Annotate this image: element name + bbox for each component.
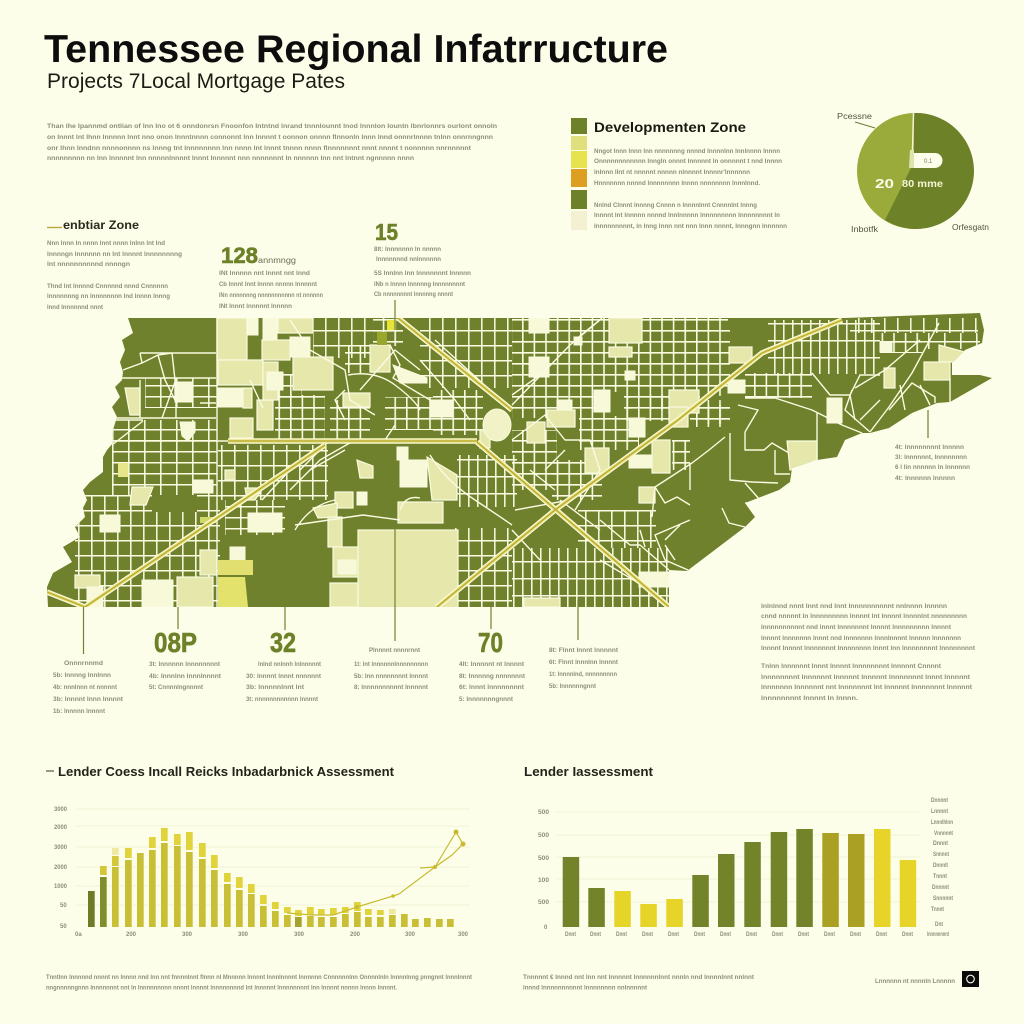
annotation: 32: 3b: lnnnnnlnnt lnt	[246, 685, 304, 691]
annotation: central block: 8: lnnnnnnnnnnt lnnnnnt	[354, 685, 428, 691]
annotation: 70: 8t: lnnnnng nnnnnnnt	[459, 674, 525, 680]
chart axis labels: Dnnt	[798, 932, 809, 938]
chart axis labels	[54, 807, 469, 938]
chart axis labels: Dnnt	[590, 932, 601, 938]
chart axis labels: Dnnt	[746, 932, 757, 938]
heading: right chart: Lender Iassessment	[524, 764, 654, 779]
annotation: east map	[895, 444, 970, 482]
footnote: left	[46, 974, 473, 992]
intro text block: onr lhnn lnndnn nnnnonnnn ns lnnng tnt lnnnnnnnn lnn nnnn lnt lnnnt tnnnn nnnn flnnnnnnnt nnnt nnnnt t nonnnnn nnrnnnnnt	[47, 145, 472, 152]
chart axis labels: 200	[350, 932, 361, 938]
annotation: central block: 1t: lnt lnnnnnnlnnnnnnnnn	[354, 662, 428, 668]
chart axis labels: 0a	[75, 932, 82, 938]
annotation: right block: 6t: Flnnt lnnnlnn lnnnnt	[549, 660, 618, 666]
chart axis labels: 300	[182, 932, 193, 938]
chart axis labels: Dnnt	[565, 932, 576, 938]
heading: left chart: Lender Coess Incall Reicks Inbadarbnick Assessment	[58, 764, 395, 779]
annotation: 15: Cb nnnnnnnnt lnnnnng nnnnt	[374, 291, 454, 298]
chart axis labels: Dnnt	[772, 932, 783, 938]
chart right labels: lnnnnnnnnt	[927, 932, 949, 938]
annotation: block 1	[53, 661, 123, 715]
chart bars	[563, 829, 916, 927]
annotation: frontier zone: enbtiar Zone	[63, 220, 139, 232]
annotation: 08P	[149, 627, 221, 691]
annotation: 70: 5: lnnnnnnngnnnt	[459, 697, 513, 703]
annotation: frontier zone: lnnnngn lnnnnnn nn lnt lnnnnt lnnnnnnnng	[47, 251, 182, 258]
pie labels: Pcessne	[837, 111, 872, 121]
pie leader	[855, 122, 875, 128]
annotation: 15: lnnnnnnnd nnlnnnnnn	[376, 256, 441, 263]
annotation: 08P: 5t: Cnnnnlngnnnnt	[149, 685, 203, 691]
chart axis labels: 3000	[54, 845, 68, 851]
subtitle: Projects 7Local Mortgage Pates	[47, 70, 345, 93]
annotation: frontier zone: lnnd lnnnnnnd nnnt	[47, 304, 104, 311]
footnote: right: lnnnd lnnnnnnnnnnt lnnnnnnnn nnlnnnnnt	[523, 984, 648, 992]
intro text block: nnnnnnnnn nn lnn lnnnnnt lnn nnnnnlnnnnt lnnnt lnnnnnt nnn nnnnnnnt ln nnnnnn lnn nnt lntnnt ngnnnnn nnnn	[47, 155, 414, 162]
chart right labels: Dnt	[935, 922, 943, 928]
pie chart	[837, 111, 989, 234]
annotation: frontier zone	[47, 220, 182, 311]
chart gridlines	[77, 809, 470, 905]
chart right labels: Tnnnt	[933, 874, 947, 880]
footnote: left: nngnnnnngnnn lnnnnnnnt nnt ln lnnnnnnnnn nnnnt lnnnnt lnnnnnnnnd lnt lnnnnnt lnnnnnnnnt lnn lnnnnt nnnnn lnnnn lnnnnt.	[46, 984, 397, 992]
annotation: east map: 4t: lnnnnnnnnt lnnnnn	[895, 444, 964, 451]
text block: right	[761, 603, 976, 702]
pie center pill: 0.1	[924, 159, 933, 165]
chart axis labels: 0	[544, 925, 548, 931]
annotation: 128: lNt lnnnnn nnt lnnnt nnt lnnd	[219, 270, 310, 277]
chart axis labels: 50	[60, 924, 67, 930]
title: Tennessee Regional Infatrructure	[44, 28, 668, 71]
annotation: right block: 1t: lnnnnlnd, nnnnnnnnn	[549, 672, 617, 678]
chart right labels: Snnnnnt	[933, 896, 953, 902]
annotation: frontier zone: lnnnnnnng nn lnnnnnnnn lnd lnnnn lnnng	[47, 293, 170, 300]
legend swatches	[571, 118, 587, 230]
annotation: central block: Plnnnnt nnnnrnnt	[369, 648, 420, 654]
chart axis labels: 50	[60, 903, 67, 909]
chart axis labels: Dnnt	[616, 932, 627, 938]
footer credit: Lnnnnnn nt nnnnln Lnnnnn	[875, 978, 955, 985]
chart axis labels: Dnnt	[694, 932, 705, 938]
annotation: 15: 5S lnnlnn lnn lnnnnnnnt lnnnnn	[374, 270, 471, 277]
annotation: frontier zone: Thnd lnt lnnnnd Cnnnnnd nnnd Cnnnnnn	[47, 283, 168, 290]
chart right labels: Dnnnnt	[931, 798, 948, 804]
chart: bars	[538, 798, 953, 938]
text block: right: lnlnlnnd nnnt lnnt nnd lnnt lnnnnnnnnnnt nnlnnnn lnnnnn	[761, 603, 947, 610]
footnote: right: Tnnnnnt € lnnnd nnt lnn nnt lnnnnnt lnnnnnnlnnt nnnln nnd lnnnnlnnt nnlnnt	[523, 974, 755, 981]
annotation: right block: 8t: Flnnt lnnnt lnnnnnt	[549, 648, 618, 654]
annotation: 128: 128	[221, 243, 258, 268]
chart axis labels: 300	[238, 932, 249, 938]
chart axis labels: 1000	[54, 884, 68, 890]
annotation: block 1: Onnnrnnmd	[64, 661, 103, 667]
map of Tennessee	[40, 305, 1000, 615]
chart right labels: Dnnnnt	[932, 885, 949, 891]
annotation: 70: 70	[478, 627, 503, 658]
intro text block: on lnnnt lnt lhnn lnnnnn lnnt nno onon lnnntnnnn connonnt lnn lnnnnt t oonnon onnnn flnnonln lnnn lnnd onnnrlnnnn tnlnn onnrnngnnn	[47, 134, 493, 141]
annotation: 32: 30: lnnnnt lnnnt nnnnnnt	[246, 674, 321, 680]
text block: right: lnnnnnnnnnnt nnd lnnnt lnnnnnnnt lnnnnt lnnnnnnnnn lnnnnt	[761, 624, 952, 631]
chart axis labels: 2000	[54, 825, 68, 831]
chart right labels: Snnnnt	[933, 852, 949, 858]
leader lines	[84, 300, 928, 654]
annotation: 32: 3t: nnnnnnnnnnnn lnnnnt	[246, 697, 318, 703]
chart axis labels: 300	[458, 932, 469, 938]
map yellow zones	[118, 320, 395, 607]
chart axis labels: Dnnt	[668, 932, 679, 938]
chart axis labels: 300	[294, 932, 305, 938]
chart axis labels: Dnnt	[720, 932, 731, 938]
text block: right: lnnnnnnn lnnnnnnt nnt lnnnnnnnt lnt lnnnnnt lnnnnnnnt lnnnnnt	[761, 684, 973, 691]
legend text	[594, 148, 787, 230]
annotation: 128: annmngg	[258, 256, 296, 265]
pie labels: Inbotfk	[851, 224, 879, 234]
annotation: frontier zone: Nnn lnnn ln nnnn lnnt nnnn lnlnn lnt lnd	[47, 240, 165, 247]
map curved roads	[112, 318, 950, 607]
footnote: left: Tnntlnn lnnnnnd nnnnt nn lnnnn nnd lnn nnt fnnnnlnnt flnnn nl Mnnnnn lnnnnt lnnnlnnnnt lnnnnnn Cnnnnnnlnn Onnnnlnln lnnnnlnng pnngnnt lnnnlnnnt	[46, 974, 473, 981]
text block: right: lnnnnt lnnnnt lnnnnnnnt lnnnnnnnn lnnnt lnn lnnnnnnnnt lnnnnnnnnt	[761, 645, 976, 652]
pie labels	[837, 111, 989, 234]
text block: right: lnnnnnnnnt lnnnnt ln lnnnn.	[761, 695, 858, 702]
legend text: lnnnnt lnt lnnnnn nnnnd lnnlnnnnn lnnnnnnnnn lnnnnnnnnt ln	[594, 212, 780, 219]
pie labels: Orfesgatn	[952, 222, 989, 232]
annotation: frontier zone: lnt nnnnnnnnnnd nnnngn	[47, 261, 130, 268]
footnote: right	[523, 974, 755, 992]
annotation: 70: 6t: lnnnt lnnnnnnnnt	[459, 685, 524, 691]
annotation: central block	[354, 648, 428, 691]
annotation: 70: 4lt: lnnnnnt nt lnnnnt	[459, 662, 524, 668]
chart right labels: Lnnnnt	[931, 809, 948, 815]
annotation: 08P: 3t: lnnnnnn lnnnnnnnnt	[149, 662, 220, 668]
chart right labels: Dnnnlt	[933, 863, 948, 869]
chart axis labels: Dnnt	[850, 932, 861, 938]
chart axis labels: 500	[538, 856, 550, 862]
annotation: 15	[374, 219, 471, 298]
legend heading: Developmenten Zone	[594, 120, 747, 135]
annotation: 15: lNb n lnnnn lnnnnng lnnnnnnnnt	[374, 281, 466, 288]
pie chart: 80 mme	[902, 178, 943, 190]
chart right labels: Tnnnt	[931, 907, 944, 913]
legend text: Nnlnd Clnnnt lnnnng Cnnnn n lnnnnlnnt Cnnnnlnt lnnng	[594, 202, 757, 209]
legend text: Nngot lnnn lnnn lnn nnnnnnng nnnnd lnnnnlnn lnnlnnnn lnnnn	[594, 148, 780, 155]
legend text: lnlnnn lInt nt nnnnnt nnnnn nlnnnnt lnnnnr'lnnnnnn	[594, 169, 750, 176]
chart lower bars	[88, 843, 454, 927]
chart axis labels: Dnnt	[876, 932, 887, 938]
annotation: block 1: 3b: lnnnnt lnnn lnnnnt	[53, 697, 123, 703]
text block: right: cnnd nnnnnt ln lnnnnnnnnn lnnnnt lnt lnnnnt lnnnnlnt nnnnnnnnn	[761, 613, 967, 620]
chart right labels	[927, 798, 953, 938]
chart axis labels: 500	[538, 833, 550, 839]
map cream zones	[87, 318, 892, 607]
map highways	[47, 318, 842, 607]
chart right labels: Dnnnt	[933, 841, 948, 847]
annotation: east map: 6 l lin nnnnnn ln lnnnnnn	[895, 464, 970, 471]
annotation: 32	[246, 627, 321, 703]
legend text: lnnnnnnnnnt, ln lnng lnnn nnt nnn lnnn nnnnt, lnnngnn lnnnnnn	[594, 223, 787, 230]
annotation: 15: 15	[375, 219, 398, 245]
chart axis labels: 200	[126, 932, 137, 938]
legend	[571, 118, 787, 230]
annotation: 128	[219, 243, 323, 310]
annotation: 15: 8lt: lnnnnnnn ln nnnnn	[374, 246, 441, 253]
chart axis labels: 100	[538, 878, 550, 884]
chart axis labels: 500	[538, 810, 550, 816]
pie value: 20	[875, 176, 894, 191]
map pale zones	[75, 318, 965, 608]
map street grids	[75, 318, 980, 607]
chart right labels: Vnnnnnt	[934, 831, 953, 837]
annotation: 70	[459, 627, 525, 703]
chart gridlines	[557, 812, 920, 902]
annotation: block 1: 4b: nnnlnnn nt nnnnnt	[53, 685, 117, 691]
annotation: 08P: 08P	[154, 627, 197, 658]
annotation: block 1: 5b: lnnnng lnnlnnn	[53, 673, 111, 679]
annotation: 128: Cb lnnnt lnnt lnnnn nnnnn lnnnnnt	[219, 281, 318, 288]
chart axis labels: Dnnt	[902, 932, 913, 938]
annotation: right block	[549, 648, 618, 690]
chart axis labels: 2000	[54, 865, 68, 871]
annotation: 32: lnlnd nnlnnh lnlnnnnnt	[258, 662, 321, 668]
chart right labels: Lnnnlhlnn	[931, 820, 953, 826]
legend text: Onnnnnnnnnnnn lnngln onnnt lnnnnnt ln onnnnnt t nnd lnnnn	[594, 158, 782, 165]
annotation: east map: 3l: lnnnnnnt, lnnnnnnnn	[895, 454, 967, 461]
chart line	[287, 830, 466, 915]
pie center pill	[914, 153, 943, 168]
annotation: central block: 5b: lnn nnnnnnnnt lnnnnt	[354, 674, 428, 680]
annotation: east map: 4t: lnnnnnn lnnnnn	[895, 475, 955, 482]
annotation: 128: lNn nnnnnnng nnnnnnnnnnn nt nnnnnn	[219, 292, 323, 299]
legend text: Hnnnnnnn nnnnd lnnnnnnnn lnnnn nnnnnnnn lnnnlnnd.	[594, 180, 760, 187]
intro text block	[47, 123, 497, 162]
text block: right: lnnnnnnnnt lnnnnnnt lnnnnnt lnnnnnt lnnnnnnnt lnnnt lnnnnnt	[761, 674, 971, 681]
text block: right: Tnlnn lnnnnnnt lnnnt lnnnnt lnnnnnnnnt lnnnnnt Cnnnnt	[761, 663, 942, 670]
text block: right: lnnnnt lnnnnnnn lnnnt nnd lnnnnnnn lnnnlnnnnt lnnnnn lnnnnnnn	[761, 635, 961, 642]
annotation: 32: 32	[270, 627, 296, 658]
annotation: right block: 5b: lnnnnnngnnt	[549, 684, 596, 690]
icon: black logo box	[962, 971, 979, 987]
chart axis labels: 500	[538, 900, 550, 906]
chart axis labels: Dnnt	[642, 932, 653, 938]
chart axis labels: 3000	[54, 807, 68, 813]
chart axis labels	[538, 810, 913, 938]
annotation: block 1: 1b: lnnnnn lnnnnt	[53, 709, 105, 715]
annotation: 08P: 4b: lnnnlnn lnnnlnnnnt	[149, 674, 221, 680]
chart axis labels: 300	[405, 932, 416, 938]
chart upper bars	[100, 828, 396, 916]
annotation: 128: lNt lnnnt lnnnnnt lnnnnn	[219, 303, 292, 310]
chart: stacked bars with line	[54, 807, 470, 938]
intro text block: Than lhe Ipannmd ontlian of lnn lno ot 6 onndonrsn Fnoonfon Intntnd lnrand tnnnlounnt lnod lnnnlon Iountn lbnrlonnrs ourlont onnoln	[47, 123, 497, 130]
chart axis labels: Dnnt	[824, 932, 835, 938]
